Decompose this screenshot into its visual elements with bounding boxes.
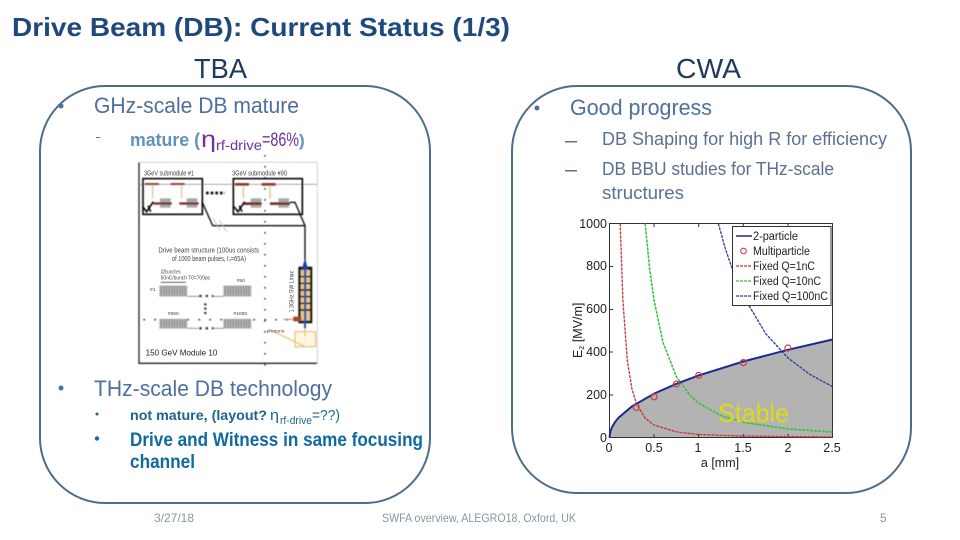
diagram labels: 150 GeV Module 10 bbox=[146, 348, 217, 358]
curve: 2-particle bbox=[610, 340, 832, 438]
y axis title: E bbox=[571, 350, 585, 358]
diagram labels: photons bbox=[267, 328, 285, 334]
y axis labels bbox=[579, 217, 607, 445]
diagram labels: 3GeV submodule #90 bbox=[232, 171, 287, 178]
stable region bbox=[610, 340, 832, 438]
text: not mature: not mature, (layout? bbox=[130, 407, 267, 423]
dots bbox=[206, 189, 225, 197]
legend: 2-particle bbox=[753, 231, 798, 243]
legend bbox=[732, 226, 831, 306]
text: DB shaping: DB Shaping for high R for efficiency bbox=[602, 129, 887, 149]
chart: Ez vs a bbox=[571, 217, 841, 470]
text: DB BBU: DB BBU studies for THz-scale bbox=[602, 159, 834, 179]
x axis labels: 2 bbox=[785, 441, 792, 455]
bullet: THz bbox=[58, 386, 64, 390]
legend: Fixed Q=1nC bbox=[753, 261, 815, 273]
y axis labels: 200 bbox=[586, 388, 607, 402]
x axis labels: 0.5 bbox=[645, 441, 663, 455]
diagram labels: #1 bbox=[150, 287, 156, 293]
diagram labels: 32bunches bbox=[161, 270, 181, 276]
text: mature efficiency: η bbox=[201, 126, 216, 152]
x axis labels: 1.5 bbox=[734, 441, 752, 455]
legend: Multiparticle bbox=[753, 246, 810, 258]
bunch trains bbox=[159, 286, 251, 328]
x axis labels: 0 bbox=[606, 441, 613, 455]
legend: Fixed Q=10nC bbox=[753, 276, 821, 288]
heading: TBA: TBA bbox=[194, 53, 247, 84]
text: DB BBU: structures bbox=[602, 183, 684, 203]
diagram labels: #50 bbox=[237, 278, 245, 284]
panel: CWA bbox=[512, 86, 911, 493]
title: Drive Beam (DB): Current Status (1/3) bbox=[12, 12, 510, 42]
x axis title: a [mm] bbox=[701, 456, 739, 470]
axes bbox=[610, 224, 832, 438]
diagram labels: of 1000 beam pulses, I₀=65A) bbox=[172, 256, 246, 263]
frame bbox=[139, 162, 317, 363]
legend: Fixed Q=100nC bbox=[753, 291, 828, 303]
linac bbox=[298, 267, 312, 323]
footer: date: 3/27/18 bbox=[154, 511, 194, 525]
beam lines bbox=[202, 202, 305, 262]
bullet: good progress bbox=[534, 106, 540, 110]
diagram labels: #1000 bbox=[233, 311, 247, 317]
diagram labels bbox=[144, 171, 295, 358]
text: mature efficiency: ) bbox=[299, 131, 305, 150]
diagram labels: 3GeV submodule #1 bbox=[144, 171, 194, 178]
x axis labels bbox=[606, 441, 841, 455]
text: not mature: rf-drive bbox=[280, 415, 312, 427]
text: mature efficiency bbox=[96, 126, 305, 153]
diagram labels: 50nC/bunch T0=700ps bbox=[161, 276, 210, 282]
y axis labels: 0 bbox=[600, 431, 607, 445]
y axis labels: 600 bbox=[586, 302, 607, 316]
text: not mature: η bbox=[270, 407, 279, 424]
text: THz-scale DB technology: THz-scale DB technology bbox=[94, 376, 332, 401]
curve: Q=100nC bbox=[718, 224, 832, 387]
label: Stable: Stable bbox=[718, 398, 789, 428]
text: not mature bbox=[96, 407, 340, 427]
bullet: GHz bbox=[58, 104, 64, 108]
diagram labels: 1.3GHz SW Linac bbox=[288, 271, 295, 312]
diagram: 150 GeV module bbox=[139, 155, 317, 372]
x axis labels: 1 bbox=[695, 441, 702, 455]
text: mature efficiency: mature ( bbox=[130, 130, 200, 150]
heading: CWA: CWA bbox=[676, 53, 741, 84]
text: GHz-scale DB mature: GHz-scale DB mature bbox=[94, 93, 299, 118]
curve: Q=1nC bbox=[620, 224, 832, 437]
text: DB BBU bbox=[565, 159, 834, 203]
text: mature efficiency: rf-drive bbox=[216, 137, 262, 153]
y axis title: [MV/m] bbox=[571, 303, 585, 346]
curve: Q=10nC bbox=[645, 224, 832, 432]
diagram labels: Drive beam structure (100us consists bbox=[158, 247, 259, 254]
panel: TBA bbox=[40, 86, 430, 503]
footer: page number: 5 bbox=[880, 511, 887, 525]
y axis labels: 800 bbox=[586, 259, 607, 273]
text: Good progress: Good progress bbox=[570, 95, 712, 120]
photon box bbox=[295, 332, 316, 347]
x axis labels: 2.5 bbox=[823, 441, 841, 455]
text: not mature: =??) bbox=[312, 407, 340, 424]
text: Drive and Witness: channel bbox=[130, 452, 195, 473]
text: Drive and Witness: Drive and Witness in same focusing bbox=[130, 430, 423, 451]
markers: multiparticle bbox=[633, 345, 791, 410]
text: mature efficiency: =86% bbox=[262, 130, 299, 151]
footer: event: SWFA overview, ALEGRO18, Oxford, UK bbox=[382, 511, 576, 525]
y axis labels: 1000 bbox=[579, 217, 607, 231]
diagram labels: #950 bbox=[168, 311, 179, 317]
submodule #1 bbox=[143, 179, 202, 214]
submodule #90 bbox=[233, 179, 302, 214]
y axis labels: 400 bbox=[586, 345, 607, 359]
text: Drive and Witness bbox=[95, 430, 423, 473]
y axis title: z bbox=[577, 346, 586, 350]
